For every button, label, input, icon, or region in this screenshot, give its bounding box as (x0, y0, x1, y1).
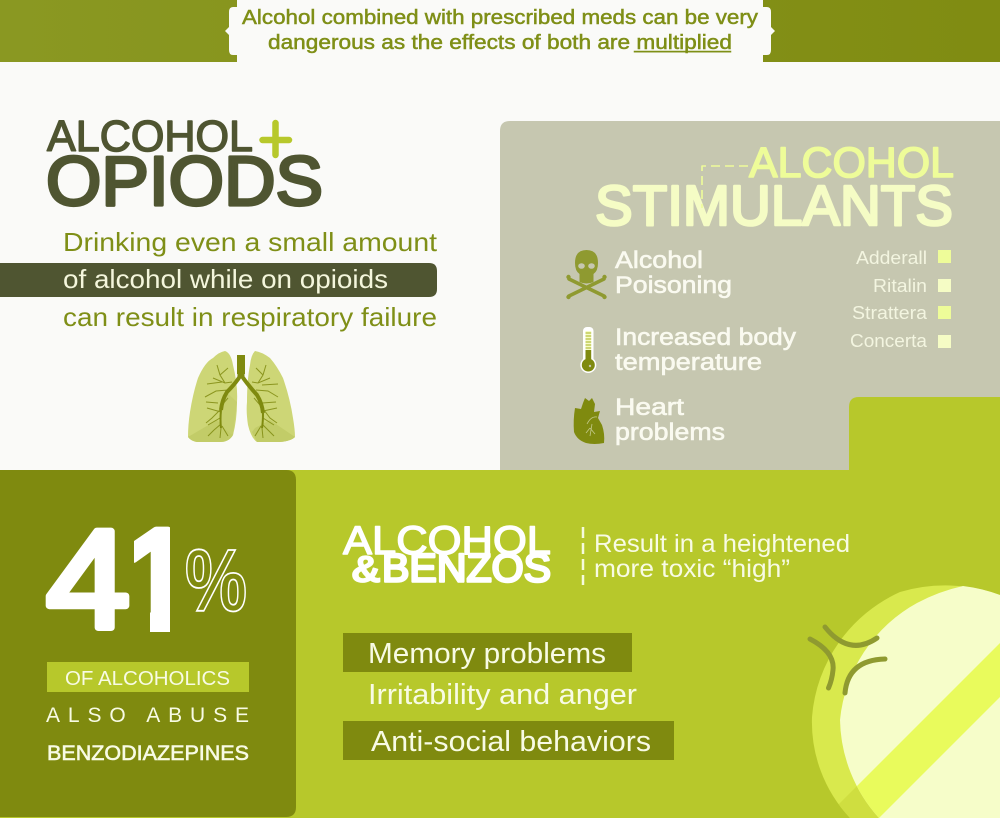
statistic: 41 percent: 1 (120, 500, 198, 658)
icon: lungs (188, 351, 295, 442)
statistic: 41 percent: % (185, 531, 247, 630)
benzo effects list: Irritability and anger (368, 679, 637, 711)
stimulant drug list (850, 248, 951, 351)
stimulant drug list: Ritalin (873, 276, 927, 296)
statistic caption (46, 662, 249, 765)
top banner (0, 0, 1000, 62)
highlight bar (0, 263, 437, 297)
benzo effects list: Memory problems (368, 638, 606, 670)
icon: heart (574, 398, 604, 444)
banner text (242, 7, 758, 54)
accent block (849, 397, 1000, 470)
heading: alcohol stimulants (595, 139, 954, 238)
icon: thermometer (580, 327, 596, 373)
panel: 41 percent statistic (0, 470, 296, 817)
banner text: Alcohol combined with prescribed meds can be very (242, 7, 758, 29)
statistic: 41 percent (46, 526, 246, 632)
opioid warning text: can result in respiratory failure (63, 302, 437, 332)
stimulant drug list: Concerta (850, 331, 928, 351)
benzo effects list: Anti-social behaviors (371, 726, 651, 758)
heading: alcohol and benzos (343, 519, 551, 590)
heading: alcohol and benzos: BENZOS (382, 546, 551, 590)
effect: alcohol poisoning (566, 247, 732, 299)
dashed divider and description (583, 527, 850, 585)
label: heart problems: Heart (615, 394, 684, 421)
stimulant drug list: Adderall (856, 248, 927, 268)
dashed divider and description: Result in a heightened (594, 530, 850, 558)
heading: alcohol stimulants: STIMULANTS (595, 174, 953, 238)
icon: pill (812, 585, 1000, 818)
heading: alcohol + opioids: ALCOHOL (47, 112, 253, 161)
panel: alcohol + benzos (0, 470, 1000, 818)
opioid warning text: of alcohol while on opioids (63, 264, 388, 294)
label: alcohol poisoning (615, 247, 732, 299)
label: heart problems: problems (615, 419, 725, 446)
label: increased body temperature: temperature (615, 349, 762, 376)
statistic caption: OF ALCOHOLICS (65, 668, 230, 690)
dashed divider and description: more toxic “high” (594, 555, 790, 583)
label: increased body temperature (615, 324, 796, 376)
label: alcohol poisoning: Alcohol (615, 247, 703, 274)
stimulant drug list: Strattera (852, 303, 928, 323)
benzo effects list (343, 633, 674, 760)
label: heart problems (615, 394, 725, 446)
effect: heart problems (574, 394, 725, 446)
banner bracket shapes (225, 7, 775, 55)
panel: alcohol + opioids (0, 112, 438, 442)
statistic caption: ALSO ABUSE (46, 704, 249, 727)
banner text: dangerous as the effects of both are multiplied (268, 32, 732, 54)
plus sign (262, 123, 289, 155)
label: alcohol poisoning: Poisoning (615, 272, 732, 299)
icon: skull and crossbones (566, 250, 607, 299)
heading: alcohol stimulants: ALCOHOL (749, 139, 954, 187)
opioid warning text (63, 227, 438, 332)
statistic caption: BENZODIAZEPINES (47, 742, 249, 765)
heading: alcohol and benzos: ALCOHOL (343, 519, 551, 563)
opioid warning text: Drinking even a small amount (63, 227, 438, 257)
label: increased body temperature: Increased body (615, 324, 796, 351)
icon: irritation marks (810, 627, 885, 693)
effect: increased body temperature (580, 324, 796, 376)
statistic: 41 percent: 4 (46, 500, 130, 658)
panel: alcohol + stimulants (500, 121, 1000, 470)
heading: alcohol and benzos: & (351, 549, 381, 590)
heading: alcohol + opioids: OPIODS (46, 142, 323, 220)
